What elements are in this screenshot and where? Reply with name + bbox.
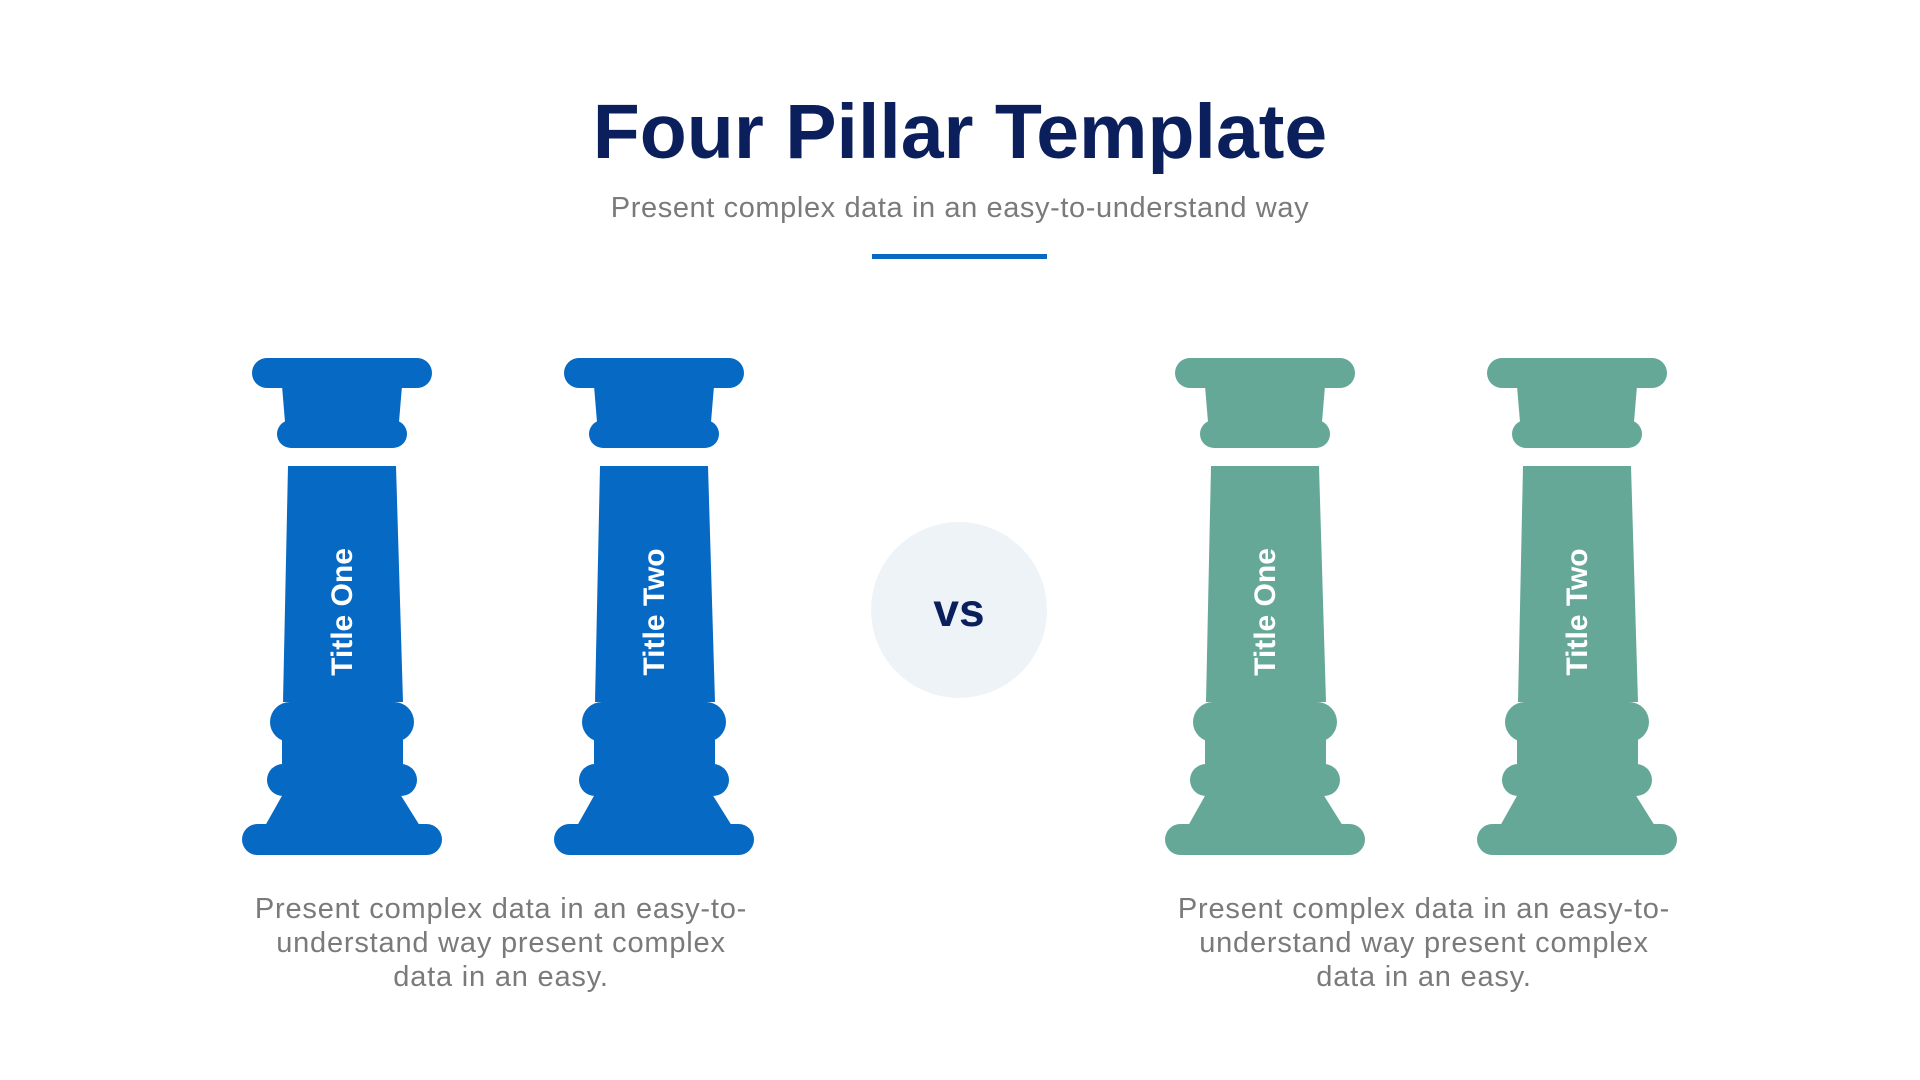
description left: data in an easy.	[393, 961, 609, 993]
subtitle: Present complex data in an easy-to-understand way	[611, 192, 1309, 224]
vs circle	[871, 522, 1047, 698]
pillar: green title one	[1165, 358, 1365, 855]
description left: Present complex data in an easy-to-	[255, 893, 747, 925]
pillar: green title one: Title One	[1249, 548, 1282, 676]
pillar: green title two	[1477, 358, 1677, 855]
pillar: blue title one: Title One	[326, 548, 359, 676]
description right: data in an easy.	[1316, 961, 1532, 993]
title: Four Pillar Template	[593, 89, 1327, 175]
description right	[1178, 893, 1670, 993]
vs circle: vs	[933, 584, 985, 636]
pillar: blue title two: Title Two	[638, 548, 671, 676]
description right: Present complex data in an easy-to-	[1178, 893, 1670, 925]
description left: understand way present complex	[276, 927, 726, 959]
description right: understand way present complex	[1199, 927, 1649, 959]
pillar: blue title one	[242, 358, 442, 855]
underline accent	[872, 254, 1047, 259]
description left	[255, 893, 747, 993]
pillar: green title two: Title Two	[1561, 548, 1594, 676]
pillar: blue title two	[554, 358, 754, 855]
